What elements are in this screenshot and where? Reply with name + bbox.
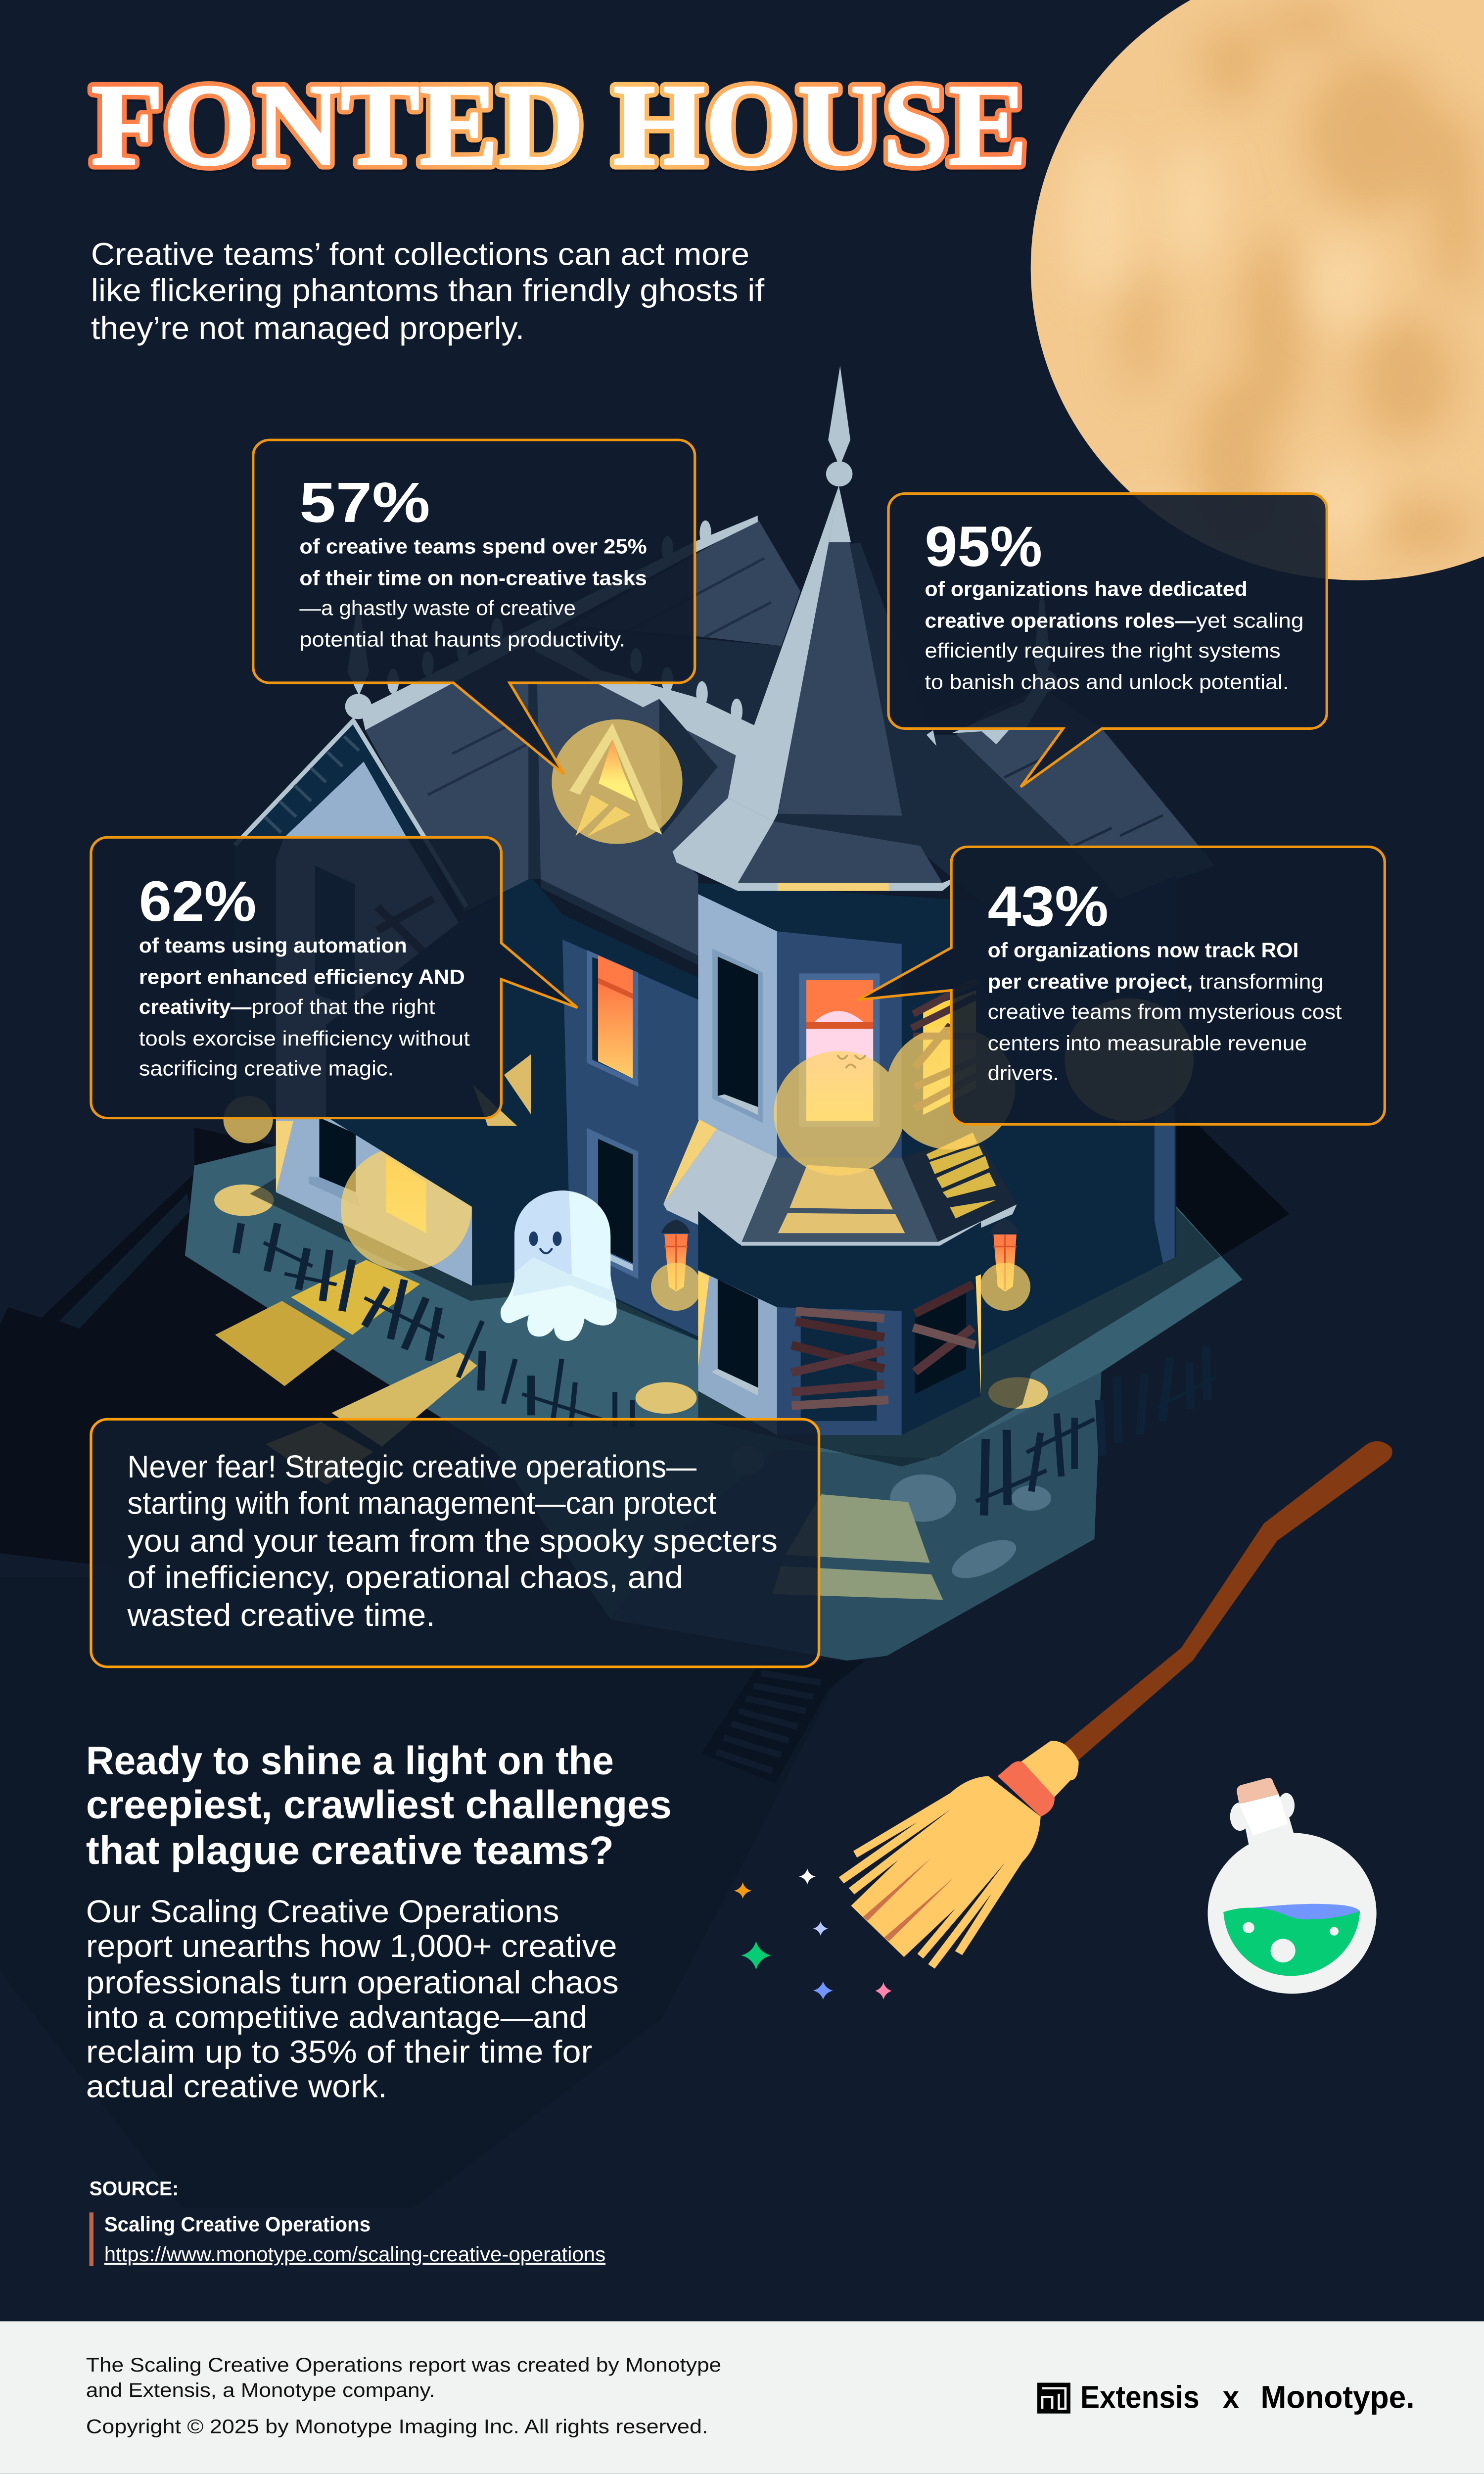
- footer credits: Copyright © 2025 by Monotype Imaging Inc. All rights reserved.: [86, 2415, 708, 2437]
- main slate roof: [361, 516, 758, 955]
- floor glows: [214, 1185, 1048, 1414]
- light glows: [224, 719, 1194, 1311]
- body text: [86, 1894, 619, 2104]
- wing window glow: [341, 1146, 471, 1271]
- description: of organizations have dedicated: [925, 578, 1248, 600]
- sparkles: [734, 1869, 892, 1999]
- footer credits: and Extensis, a Monotype company.: [86, 2379, 435, 2401]
- description: creative operations roles—: [925, 609, 1197, 632]
- broom head: [1019, 1741, 1079, 1798]
- body text: Our Scaling Creative Operations: [86, 1894, 559, 1929]
- ground island: [185, 1145, 1243, 1661]
- ground ovals: [731, 1446, 1051, 1586]
- body text: reclaim up to 35% of their time for: [86, 2034, 592, 2069]
- potion flask: [1207, 1778, 1377, 1994]
- right fence: [976, 1345, 1216, 1516]
- intro text: like flickering phantoms than friendly ghosts if: [91, 273, 765, 308]
- source: [90, 2177, 605, 2266]
- liquid: [1251, 1904, 1360, 1933]
- description: drivers.: [988, 1062, 1059, 1085]
- body text: report unearths how 1,000+ creative: [86, 1929, 617, 1964]
- porch roof: [663, 1119, 1017, 1246]
- card: 57%: [253, 440, 695, 774]
- heading: ready to shine: [86, 1739, 672, 1873]
- ghost: [501, 1190, 617, 1341]
- logo text: Monotype.: [1260, 2379, 1415, 2415]
- logo text: x: [1223, 2379, 1239, 2415]
- tower wall: [698, 894, 902, 1157]
- description: yet scaling: [1196, 609, 1303, 632]
- right roof: [850, 542, 1215, 911]
- logo text: Extensis: [1080, 2379, 1200, 2415]
- source: SOURCE:: [90, 2177, 179, 2199]
- description: —a ghastly waste of creative: [299, 597, 576, 619]
- source: https://www.monotype.com/scaling-creative-operations: [104, 2243, 605, 2266]
- description: transforming: [1200, 970, 1324, 993]
- intro text: [91, 237, 765, 346]
- house shadow on ground: [250, 1178, 1221, 1467]
- broom handle: [1064, 1441, 1392, 1760]
- gable wing wall: [235, 720, 571, 1285]
- description: potential that haunts productivity.: [299, 628, 625, 651]
- sad face: [838, 1056, 865, 1068]
- main walls: [531, 875, 1176, 1356]
- description: of organizations now track ROI: [988, 939, 1298, 961]
- source: Scaling Creative Operations: [104, 2213, 371, 2236]
- description: centers into measurable revenue: [988, 1032, 1307, 1054]
- stat: 43%: [988, 874, 1109, 938]
- title: FONTED HOUSE: [91, 61, 1027, 190]
- card: 43%: [858, 847, 1385, 1124]
- window: dark: [587, 1128, 638, 1279]
- description: report enhanced efficiency AND: [139, 966, 465, 988]
- spire: [728, 366, 902, 821]
- callout: never fear: [91, 1419, 819, 1667]
- description: [139, 934, 470, 1080]
- title: FONTED HOUSE: [91, 61, 1027, 190]
- intro text: Creative teams’ font collections can act more: [91, 237, 749, 272]
- back roof: [535, 519, 800, 728]
- roof ridges: [361, 516, 758, 730]
- light patches: [786, 1494, 930, 1563]
- description: creativity—: [139, 996, 252, 1018]
- lanterns: [661, 1219, 1019, 1291]
- card: 95%: [888, 494, 1327, 787]
- intro text: they’re not managed properly.: [91, 311, 524, 346]
- attic star window: [569, 723, 662, 836]
- left fence: [236, 1223, 633, 1427]
- callout text: Never fear! Strategic creative operations—: [128, 1449, 697, 1484]
- boards: [791, 1285, 975, 1406]
- spire skirt roof: [673, 798, 952, 891]
- heading: ready to shine: that plague creative teams?: [86, 1829, 614, 1873]
- callout text: of inefficiency, operational chaos, and: [128, 1560, 683, 1595]
- body text: professionals turn operational chaos: [86, 1965, 619, 2000]
- cork: [1237, 1778, 1279, 1804]
- heading: ready to shine: creepiest, crawliest challenges: [86, 1783, 672, 1827]
- description: efficiently requires the right systems: [925, 639, 1281, 662]
- callout text: [127, 1449, 778, 1632]
- callout text: starting with font management—can protect: [128, 1485, 716, 1521]
- description: sacrificing creative magic.: [139, 1057, 394, 1080]
- broom: [839, 1441, 1392, 1969]
- title: FONTED HOUSE: [91, 64, 1027, 193]
- heading: ready to shine: Ready to shine a light on the: [86, 1739, 614, 1783]
- window: orange: [587, 950, 638, 1087]
- description: [299, 535, 647, 651]
- ground shadows: [0, 1104, 1290, 2208]
- window: center: [799, 973, 880, 1127]
- description: proof that the right: [251, 996, 435, 1018]
- description: of teams using automation: [139, 934, 407, 957]
- description: tools exorcise inefficiency without: [139, 1027, 470, 1050]
- footer credits: The Scaling Creative Operations report was created by Monotype: [86, 2354, 721, 2376]
- body text: into a competitive advantage—and: [86, 1999, 587, 2035]
- footer credits: [86, 2354, 721, 2437]
- body text: actual creative work.: [86, 2069, 387, 2104]
- lower tower: [698, 1211, 981, 1435]
- stat: 62%: [139, 870, 256, 933]
- logo text: [1080, 2379, 1415, 2415]
- callout text: you and your team from the spooky specters: [128, 1523, 778, 1559]
- stat: 95%: [925, 515, 1042, 578]
- extensis logo mark: [1037, 2383, 1070, 2414]
- card: 62%: [91, 837, 577, 1118]
- stat: 57%: [299, 471, 430, 534]
- description: creative teams from mysterious cost: [988, 1000, 1342, 1023]
- description: [925, 578, 1303, 694]
- gable: [235, 598, 466, 907]
- moon: [1031, 0, 1484, 580]
- description: [988, 939, 1342, 1085]
- description: of their time on non-creative tasks: [299, 567, 647, 589]
- boarded window right: [912, 981, 977, 1115]
- description: of creative teams spend over 25%: [299, 535, 647, 558]
- description: to banish chaos and unlock potential.: [925, 671, 1289, 694]
- footer: [0, 2321, 1484, 2474]
- callout text: wasted creative time.: [127, 1597, 435, 1632]
- description: per creative project,: [988, 970, 1193, 993]
